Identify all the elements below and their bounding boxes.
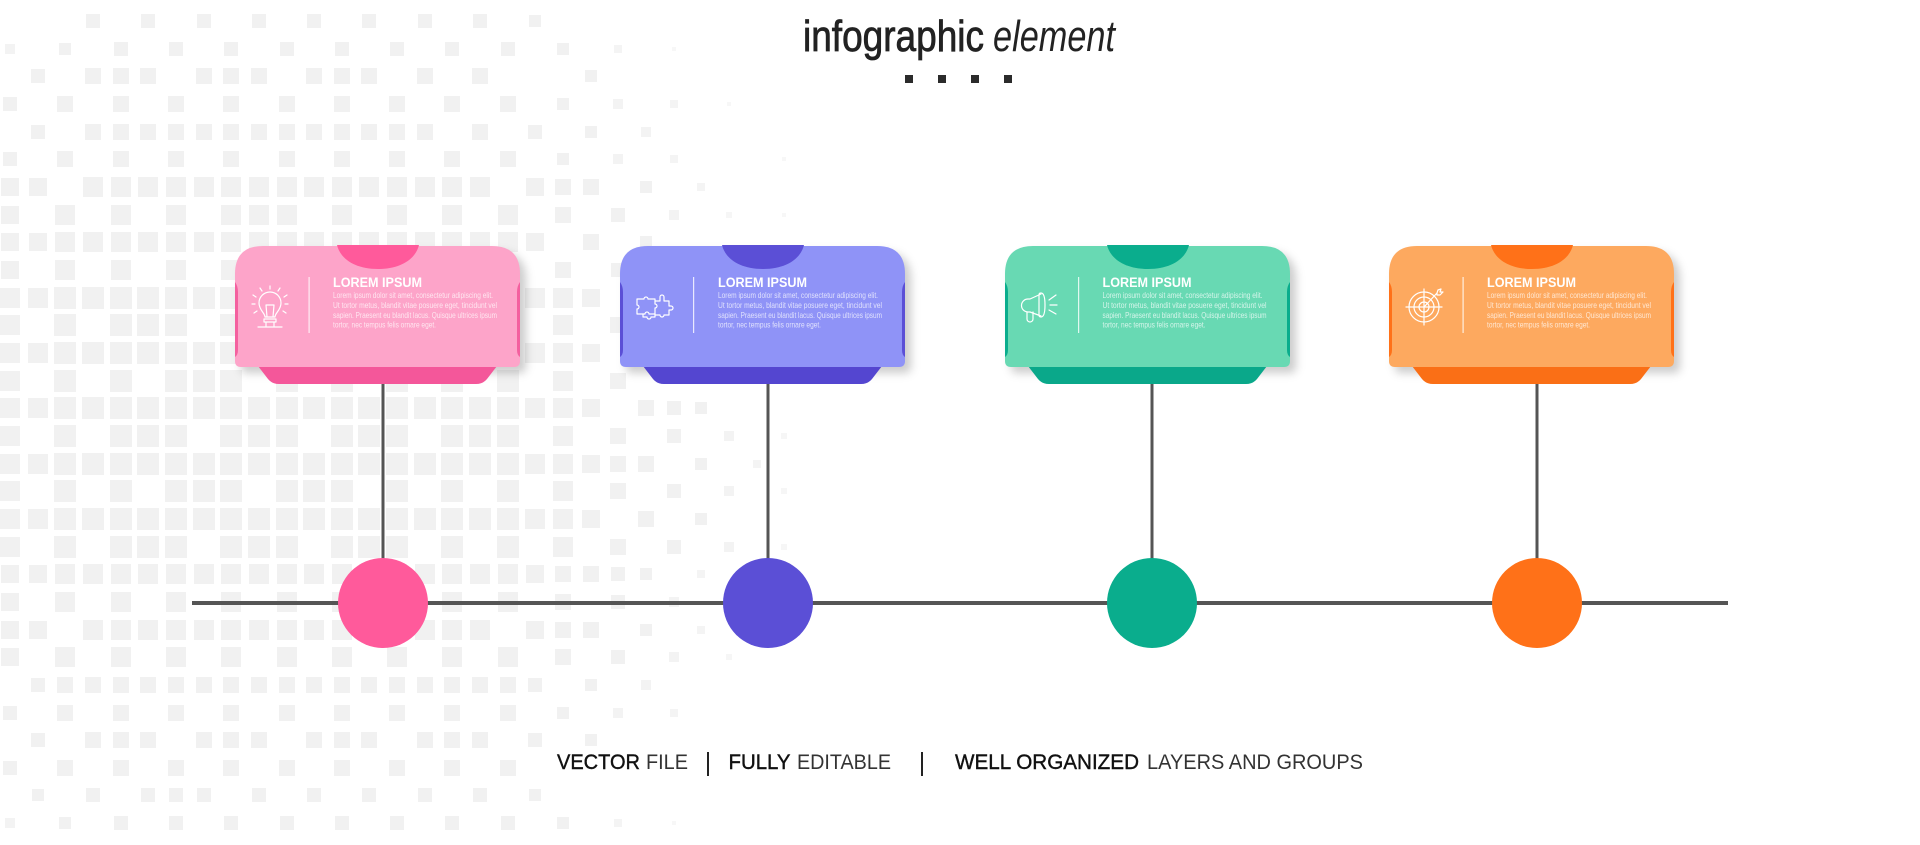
panel: pink card (235, 245, 526, 384)
divider (693, 277, 694, 333)
stem: step 1 (382, 380, 384, 560)
text block: sapien. Praesent eu blandit lacus. Quisque ultrices ipsum (1102, 310, 1266, 320)
panel: orange card (1389, 245, 1680, 384)
text block: Ut tortor metus, blandit vitae posuere eget, tincidunt vel (333, 300, 497, 310)
text block: Lorem ipsum dolor sit amet, consectetur adipiscing elit. (1102, 290, 1262, 300)
text block: Lorem ipsum dolor sit amet, consectetur adipiscing elit. (333, 290, 493, 300)
stem: step 4 (1536, 380, 1538, 560)
text block: tortor, nec tempus felis ornare eget. (718, 320, 821, 330)
icon: megaphone (1022, 293, 1057, 322)
title: element (993, 12, 1116, 61)
text block: LOREM IPSUM (1102, 275, 1192, 290)
text block (1487, 275, 1651, 330)
text block: Lorem ipsum dolor sit amet, consectetur adipiscing elit. (1487, 290, 1647, 300)
text block: LOREM IPSUM (333, 275, 422, 290)
text block (1102, 275, 1267, 330)
icon: light bulb (252, 286, 288, 327)
divider (308, 277, 310, 333)
title (803, 12, 1116, 61)
icon: puzzle (637, 295, 673, 319)
text block: tortor, nec tempus felis ornare eget. (333, 320, 436, 330)
text block: sapien. Praesent eu blandit lacus. Quisque ultrices ipsum (333, 310, 497, 320)
text block: Ut tortor metus, blandit vitae posuere eget, tincidunt vel (1102, 300, 1267, 310)
text block: Ut tortor metus, blandit vitae posuere eget, tincidunt vel (718, 300, 882, 310)
divider (1078, 277, 1079, 333)
footer caption: WELL ORGANIZED (955, 751, 1139, 774)
stem: step 2 (766, 380, 770, 560)
text block: Lorem ipsum dolor sit amet, consectetur adipiscing elit. (718, 290, 878, 300)
node: purple circle (723, 558, 813, 648)
text block: tortor, nec tempus felis ornare eget. (1487, 320, 1590, 330)
stem: step 3 (1150, 380, 1154, 560)
text block: LOREM IPSUM (1487, 275, 1576, 290)
text block: LOREM IPSUM (718, 275, 807, 290)
panel: purple card (620, 245, 911, 384)
footer caption: VECTOR (557, 751, 640, 774)
footer caption: LAYERS AND GROUPS (1147, 751, 1363, 774)
text block: tortor, nec tempus felis ornare eget. (1102, 320, 1206, 330)
text block: Ut tortor metus, blandit vitae posuere eget, tincidunt vel (1487, 300, 1651, 310)
icon: target (1406, 289, 1443, 325)
footer caption: FILE (646, 751, 688, 774)
text block: sapien. Praesent eu blandit lacus. Quisque ultrices ipsum (1487, 310, 1651, 320)
footer caption (557, 751, 1363, 776)
footer caption: FULLY (728, 751, 790, 774)
node: green circle (1107, 558, 1197, 648)
footer caption: EDITABLE (797, 751, 891, 774)
node: pink circle (338, 558, 428, 648)
text block: sapien. Praesent eu blandit lacus. Quisque ultrices ipsum (718, 310, 882, 320)
title dots (905, 75, 1012, 83)
divider (1462, 277, 1464, 333)
node: orange circle (1492, 558, 1582, 648)
panel: green card (1005, 245, 1296, 384)
timeline axis (192, 601, 1728, 605)
title: infographic (803, 12, 984, 61)
text block (718, 275, 882, 330)
text block (333, 275, 497, 330)
